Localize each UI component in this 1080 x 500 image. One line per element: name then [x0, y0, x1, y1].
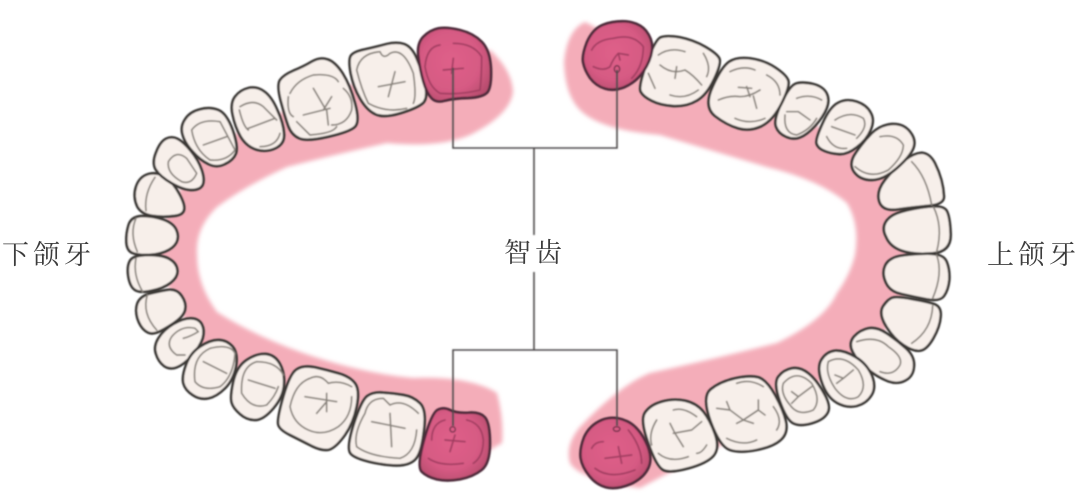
- wisdom tooth: lower-right: [580, 418, 650, 488]
- tooth: lower-right molar 1: [706, 376, 787, 452]
- label: upper-jaw teeth: 上颌牙: [987, 240, 1080, 270]
- tooth: lower-left 4: [231, 354, 284, 420]
- tooth: lower-left molar 2: [349, 392, 425, 465]
- wisdom tooth: lower-left: [420, 408, 490, 480]
- tooth: upper-right 6: [852, 124, 914, 180]
- teeth: [126, 21, 951, 488]
- gums: [150, 22, 930, 488]
- tooth: lower-left 6: [155, 318, 204, 368]
- tooth: upper-right molar 1: [640, 36, 720, 106]
- tooth: lower-left 8: [128, 255, 177, 292]
- tooth: upper-right 7: [878, 153, 944, 210]
- callout lines: wisdom tooth leaders: [453, 68, 617, 426]
- upper-right quadrant teeth: [583, 21, 951, 254]
- tooth: upper-right molar 2: [709, 58, 789, 130]
- wisdom tooth: upper-right: [583, 21, 652, 90]
- wisdom tooth: upper-left: [418, 28, 491, 102]
- tooth: upper-right 5: [816, 100, 873, 154]
- tooth: upper-right 8: [884, 206, 951, 254]
- tooth: upper-left 6: [154, 137, 204, 190]
- tooth: upper-left 5: [182, 108, 237, 166]
- tooth: lower-right 6: [851, 328, 914, 383]
- leader: top bracket: [453, 68, 617, 235]
- tooth: lower-left 7: [136, 290, 185, 333]
- label: lower-jaw teeth: 下颌牙: [2, 240, 95, 270]
- lower-left quadrant teeth: [128, 255, 490, 480]
- tooth: upper-right 4: [775, 83, 828, 139]
- leader: bottom bracket: [453, 272, 617, 426]
- tooth: upper-left molar 2: [349, 43, 426, 116]
- lower-right quadrant teeth: [580, 254, 949, 488]
- left gum: [150, 50, 513, 450]
- tooth: lower-right 4: [776, 368, 829, 425]
- tooth: lower-right molar 2: [643, 400, 717, 471]
- tooth: upper-left 4: [232, 87, 284, 151]
- tooth: upper-left molar: [278, 58, 357, 140]
- right gum: [564, 22, 930, 488]
- upper-left quadrant teeth: [126, 28, 491, 255]
- tooth: upper-left 8: [126, 216, 178, 255]
- tooth: lower-right 7: [881, 297, 941, 351]
- tooth: lower-right 5: [819, 351, 874, 407]
- tooth: lower-left molar 1: [278, 367, 358, 450]
- tooth: lower-left 5: [183, 340, 237, 399]
- tooth: upper-left 7: [135, 173, 184, 217]
- tooth: lower-right 8: [884, 254, 949, 300]
- label: wisdom teeth: 智齿: [504, 238, 566, 268]
